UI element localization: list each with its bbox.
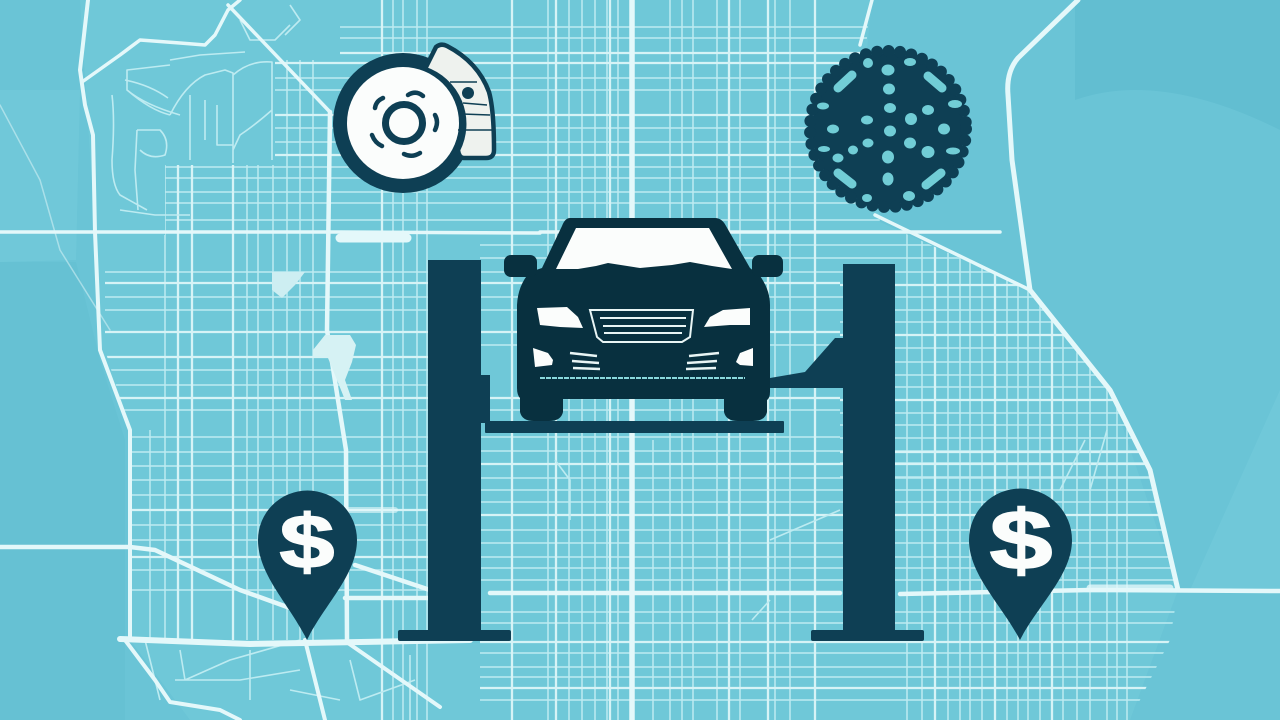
icon: brake disc and caliper xyxy=(333,45,494,193)
icon: left dollar location pin: $ xyxy=(280,499,334,584)
front grille xyxy=(590,310,693,342)
bumper line xyxy=(540,377,745,379)
left mirror xyxy=(504,255,537,277)
car body xyxy=(517,218,770,421)
icon: left dollar location pin xyxy=(258,490,357,640)
disc hub xyxy=(386,104,422,142)
lift platform xyxy=(485,421,784,433)
lift arm xyxy=(770,338,843,388)
disc bolts xyxy=(372,93,437,156)
right post xyxy=(843,264,895,632)
curving neighbourhood streets xyxy=(112,5,1107,720)
icon: virus particle xyxy=(810,51,966,207)
icon: right dollar location pin xyxy=(969,489,1072,640)
icon: car front view xyxy=(504,218,783,421)
right mirror xyxy=(752,255,783,277)
fog lights xyxy=(533,348,553,367)
icon: right dollar location pin: $ xyxy=(989,494,1053,588)
lower vents xyxy=(570,353,719,369)
caliper xyxy=(425,45,494,158)
caliper details xyxy=(450,82,492,130)
windshield xyxy=(556,228,732,269)
left post xyxy=(428,260,481,632)
car lift xyxy=(398,260,924,641)
headlights xyxy=(537,307,583,328)
